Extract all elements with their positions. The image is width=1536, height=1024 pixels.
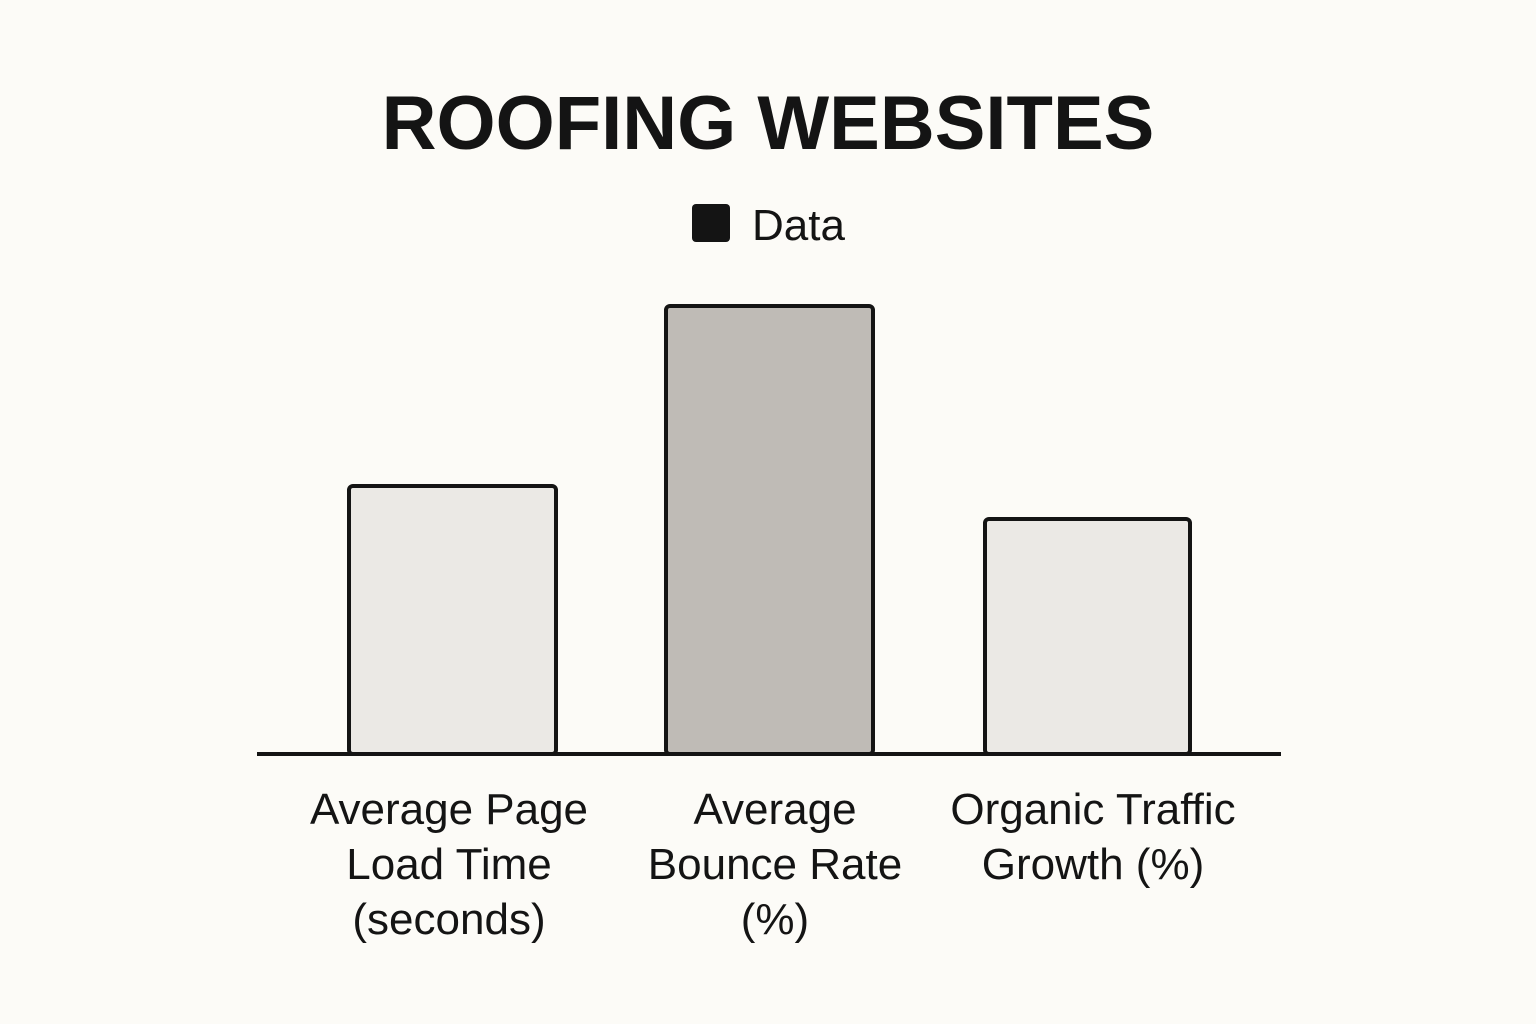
bar: organic traffic [985, 519, 1190, 754]
title: ROOFING WEBSITES [382, 81, 1154, 166]
label: page load time: Load Time [346, 840, 552, 889]
label: bounce rate: Average [693, 785, 857, 834]
label: organic traffic: Organic Traffic [950, 785, 1236, 834]
label: bounce rate: (%) [741, 895, 809, 944]
legend: Data [752, 201, 845, 250]
bar: bounce rate [666, 306, 873, 754]
label: organic traffic [950, 785, 1236, 889]
bar: page load time [349, 486, 556, 754]
legend [692, 201, 845, 250]
label: page load time [310, 785, 588, 944]
label: page load time: (seconds) [352, 895, 546, 944]
label: bounce rate [648, 785, 902, 944]
label: organic traffic: Growth (%) [982, 840, 1204, 889]
label: page load time: Average Page [310, 785, 588, 834]
label: bounce rate: Bounce Rate [648, 840, 902, 889]
